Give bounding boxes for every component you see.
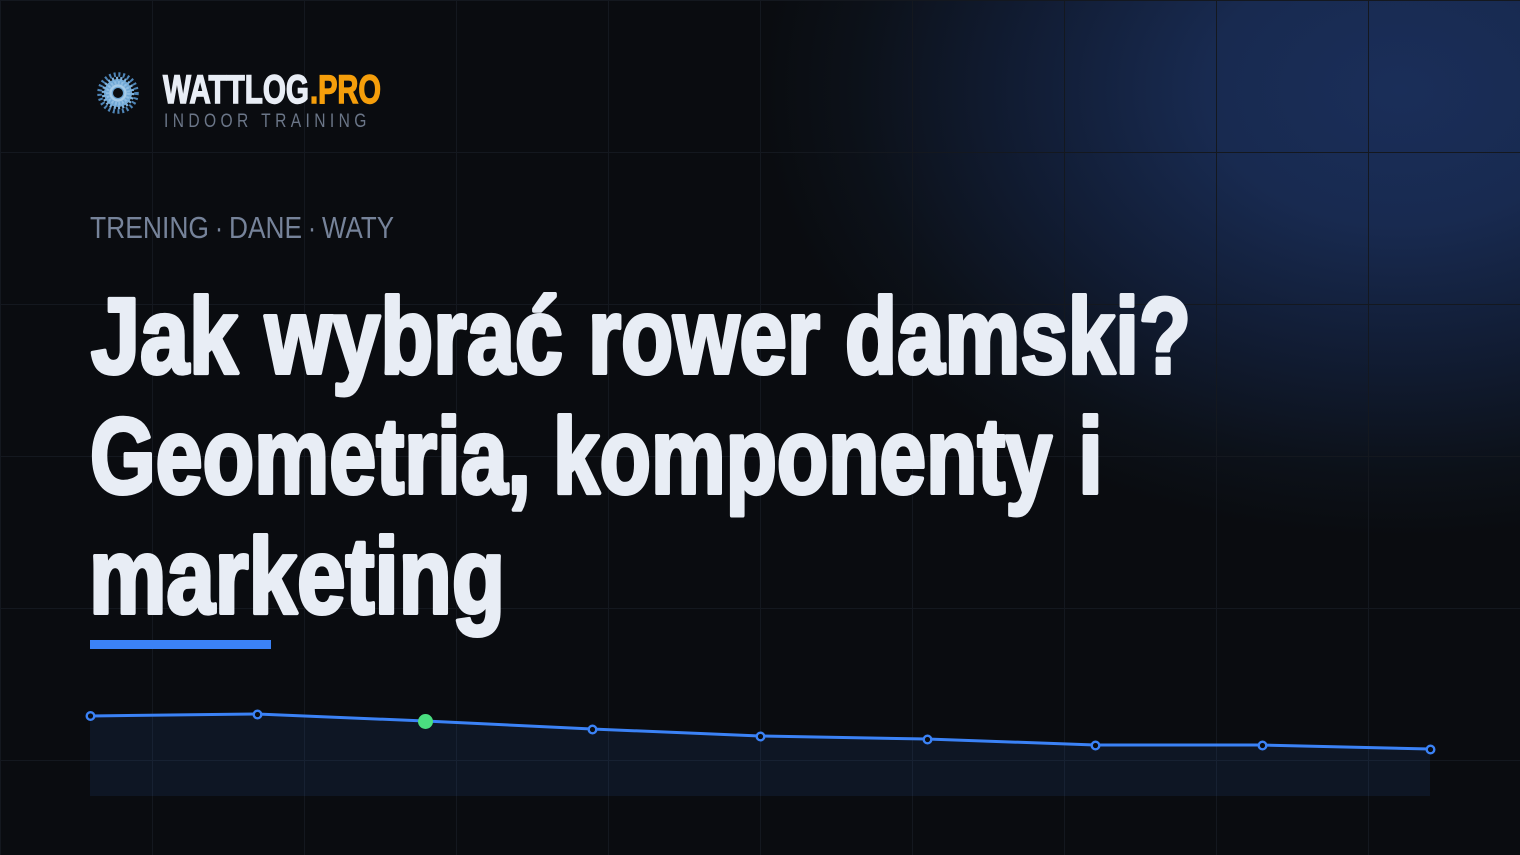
tagline: WATY (322, 210, 394, 245)
tagline (90, 210, 394, 245)
logo subtitle: INDOOR TRAINING (164, 109, 366, 131)
tagline: TRENING (90, 210, 209, 245)
icon: cassette sprocket logo (100, 74, 136, 112)
title: komponenty (553, 395, 1052, 516)
line chart: area, line and points (87, 711, 1434, 796)
title: i (1078, 395, 1103, 516)
title: marketing (89, 515, 505, 636)
logo wordmark: WATTLOG.PRO: WATTLOG (163, 68, 309, 112)
title: damski? (845, 275, 1191, 396)
title: Jak (91, 275, 239, 396)
tagline: · (308, 210, 316, 245)
title (89, 275, 1191, 636)
logo wordmark: WATTLOG.PRO: .PRO (310, 68, 381, 112)
title: wybrać (264, 275, 563, 396)
title accent underline (90, 640, 271, 649)
title: Geometria, (90, 395, 531, 516)
title: rower (588, 275, 820, 396)
tagline: · (215, 210, 223, 245)
tagline: DANE (229, 210, 302, 245)
highlighted point (418, 714, 433, 729)
